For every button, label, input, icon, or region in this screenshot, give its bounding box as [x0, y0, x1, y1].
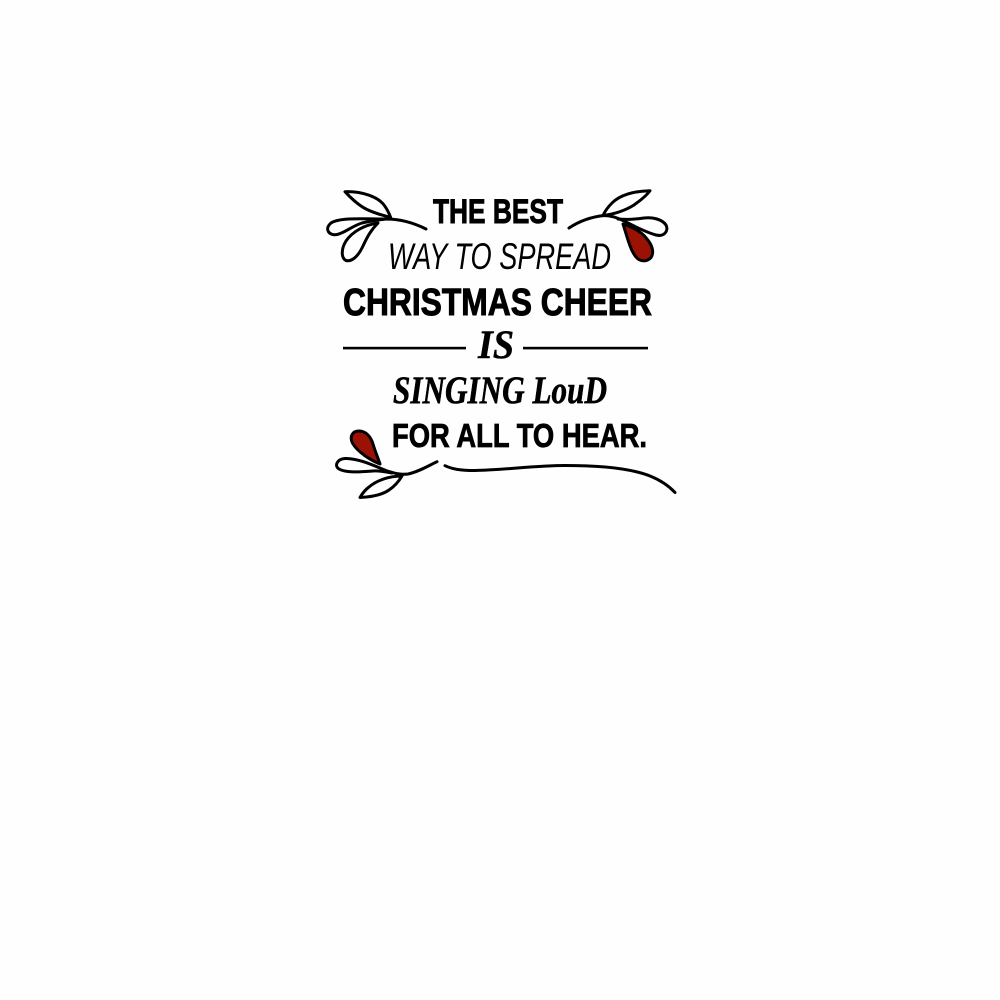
heading: for all to hear: FOR ALL TO HEAR. — [392, 417, 647, 454]
text: is: IS — [477, 322, 514, 367]
icon: top left sprig — [328, 192, 426, 261]
divider right of is — [523, 347, 648, 349]
quote text — [343, 193, 652, 454]
text: singing loud: SINGING LouD — [393, 369, 607, 412]
swash under last line — [445, 466, 675, 492]
text: way to spread: WAY TO SPREAD — [388, 236, 611, 277]
icon: bottom left sprig — [337, 431, 437, 498]
icon: top right sprig — [569, 191, 667, 261]
heading: the best: THE BEST — [433, 193, 563, 231]
divider left of is — [343, 347, 466, 349]
icon: red berry top — [623, 224, 653, 261]
icon: red berry bottom — [351, 431, 380, 464]
heading: christmas cheer: CHRISTMAS CHEER — [343, 282, 652, 324]
